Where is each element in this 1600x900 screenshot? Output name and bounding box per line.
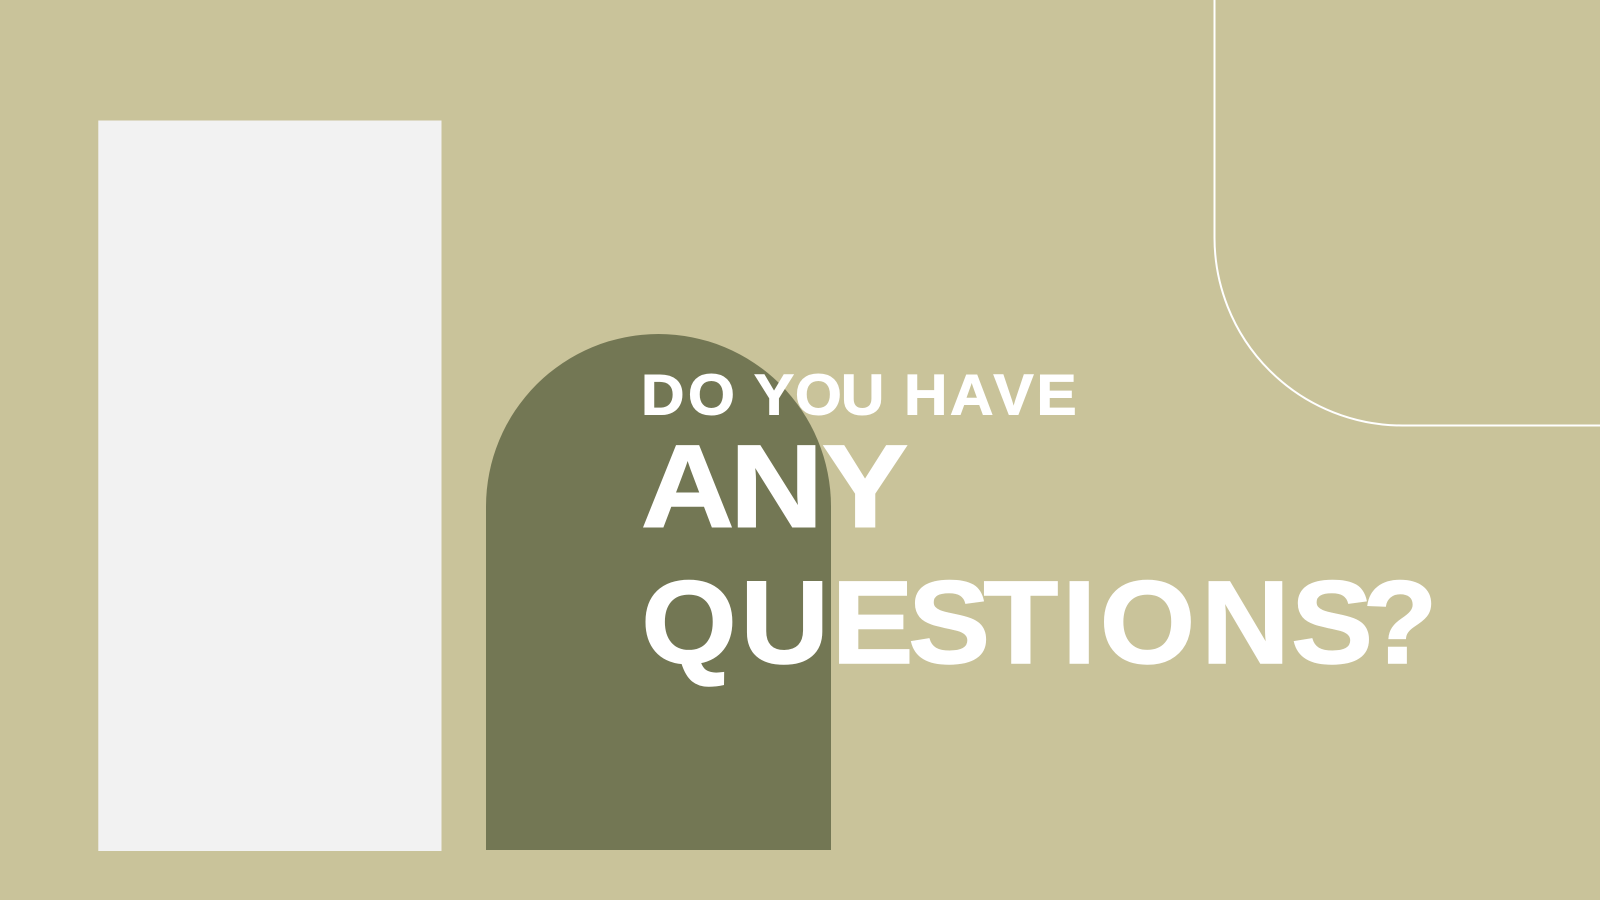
heading line: questions: QUESTIONS?: [641, 556, 1437, 688]
decorative outline: rounded corner line: [1214, 0, 1600, 426]
heading line: any: ANY: [641, 421, 908, 552]
heading line: do you have: DO YOU HAVE: [641, 364, 1077, 427]
panel: olive arch: [486, 334, 831, 850]
title: do you have any questions: [641, 364, 1437, 688]
panel: white rectangle: [98, 120, 442, 851]
